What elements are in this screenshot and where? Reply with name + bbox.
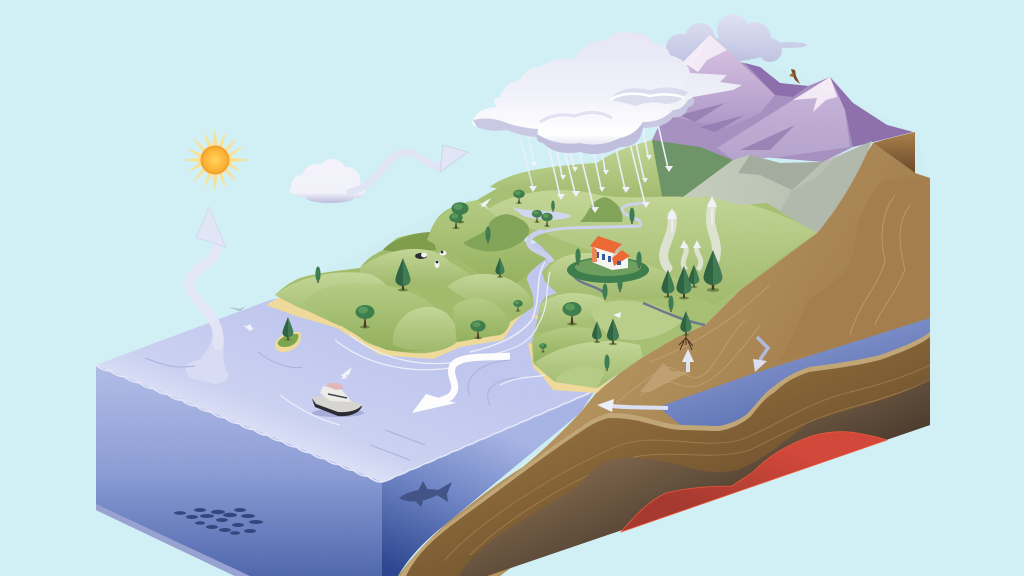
house with hedge garden <box>567 236 649 283</box>
ocean: scalloped edge <box>96 365 590 482</box>
cloud: lower base shadow <box>537 122 643 154</box>
hill: light oval <box>592 300 682 340</box>
land: lake <box>512 207 572 220</box>
hill: right upper <box>447 274 533 310</box>
mountain: base purple <box>652 35 913 162</box>
trees <box>315 190 722 371</box>
hill: mid front <box>303 283 455 352</box>
hill: right lower <box>453 298 510 342</box>
evaporation plumes from land <box>664 196 717 270</box>
tree roots <box>679 335 693 350</box>
land: north island <box>275 200 547 353</box>
hill: lower domes <box>535 341 643 388</box>
mountain: rear peak light face <box>673 35 775 128</box>
hill: cow pasture dome <box>360 249 473 285</box>
arrow: evaporation from ocean <box>186 207 228 384</box>
geology: dark rock layer <box>459 380 930 576</box>
land: sand coast <box>266 280 620 393</box>
land: upper and south base <box>477 140 817 388</box>
geology: upper soil and cliff <box>398 132 930 576</box>
arrow: infiltration <box>753 337 768 372</box>
cloud: small drifting cloud <box>289 159 365 203</box>
arrow: river runoff to ocean <box>412 356 510 413</box>
cloud: inner puffs <box>610 87 688 106</box>
hill: upper bank <box>547 253 695 299</box>
arrow: moisture transport <box>350 145 468 192</box>
sun <box>183 128 250 192</box>
arrow: groundwater flow to sea <box>597 399 668 412</box>
mountain: shadow streaks <box>680 103 795 150</box>
hill: first dome <box>538 293 605 332</box>
land: back hills <box>480 140 817 305</box>
mountain: dark rear slope <box>745 63 808 97</box>
land: dark green valley <box>652 140 733 197</box>
cows <box>415 250 446 268</box>
ocean ripples <box>145 352 520 460</box>
mountains <box>652 35 913 162</box>
boat <box>311 383 364 417</box>
groundwater body <box>658 318 930 428</box>
mountain: dark right slope <box>830 77 913 147</box>
ocean light ripples <box>280 335 545 425</box>
geology: brown middle layer <box>406 337 930 576</box>
ocean: bottom edge strip <box>96 504 250 576</box>
ocean: front right face <box>382 392 594 576</box>
hill: upper large slope <box>427 200 547 290</box>
geology: tan sand line below the water table <box>400 332 930 576</box>
ocean: front left face <box>96 365 382 576</box>
land: dark fields <box>580 197 623 222</box>
ocean: surface <box>96 240 600 482</box>
rain arrows <box>518 120 673 213</box>
geology: light fold ridge <box>640 363 690 392</box>
geology: darker fold in cliff <box>778 178 930 362</box>
eagle <box>789 69 800 84</box>
cloud: right base shadow <box>643 97 694 128</box>
shark <box>399 481 452 507</box>
fish school <box>174 508 263 535</box>
island with tree <box>275 317 301 352</box>
mountain: front peak <box>717 77 850 160</box>
water cycle illustration <box>96 14 930 576</box>
hill: center front <box>393 307 457 350</box>
hill: left low <box>275 272 389 326</box>
arrow: uptake <box>682 349 694 372</box>
land: gray rocky hills <box>683 141 872 233</box>
geology: strata lines <box>617 195 910 402</box>
land: gray roads <box>573 275 705 325</box>
cloud: left base shadow <box>473 119 538 137</box>
land: river <box>470 203 645 355</box>
hill: dark field <box>463 214 529 251</box>
seagulls <box>228 198 621 379</box>
hill: second dome <box>533 327 605 362</box>
cloud: big rain cloud <box>472 32 742 154</box>
geology: red magma <box>621 432 887 532</box>
mountain: snow caps <box>683 35 837 112</box>
hill: dark back dome <box>383 232 436 252</box>
cloud: behind the peak <box>666 14 807 62</box>
land: south bank hills <box>533 253 695 388</box>
